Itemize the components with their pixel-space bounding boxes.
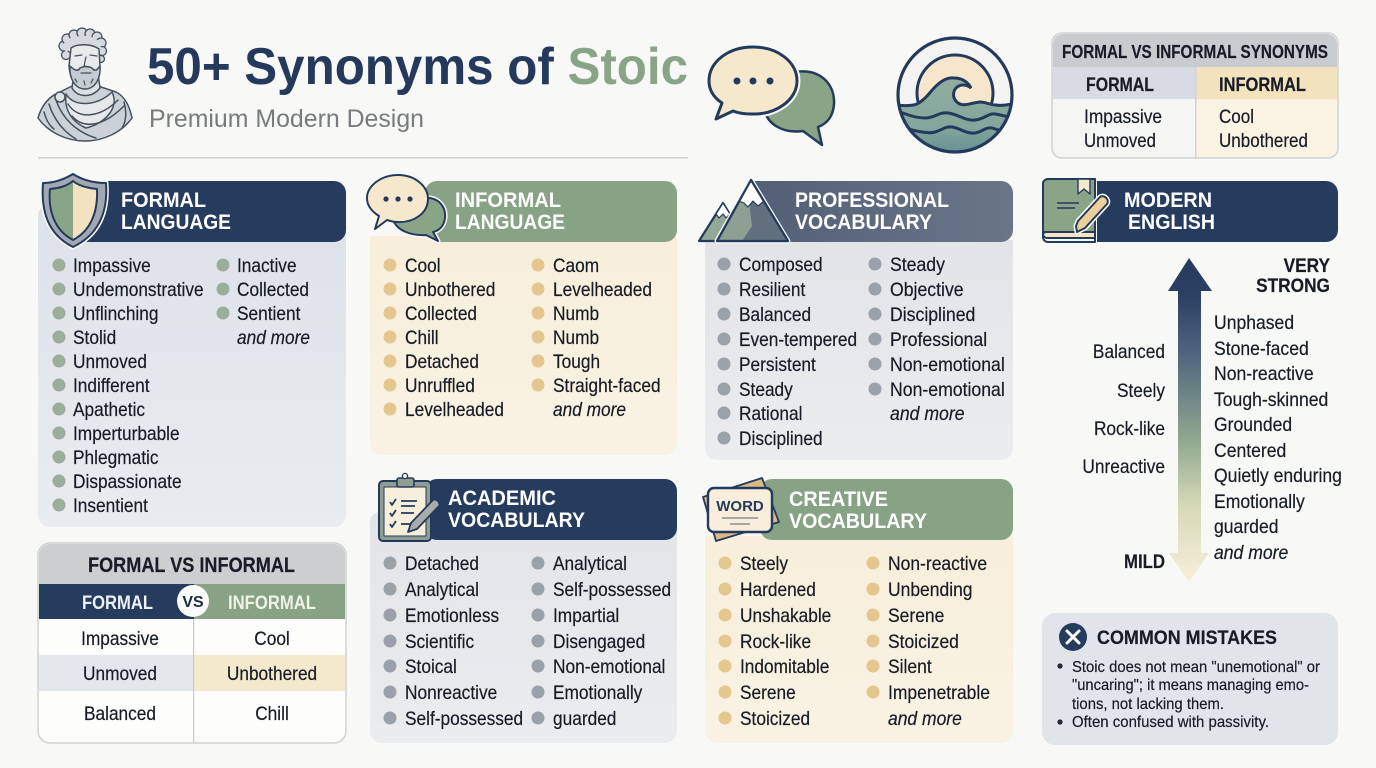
bullets bbox=[718, 258, 882, 444]
column heads: INFORMAL bbox=[228, 593, 316, 614]
word list left: Indomitable bbox=[740, 656, 829, 677]
word list right: Non-emotional bbox=[553, 656, 665, 677]
word list right: Non-emotional bbox=[890, 378, 1005, 400]
word list left: Stolid bbox=[73, 327, 116, 348]
label: very strong: VERY bbox=[1284, 255, 1330, 276]
table entries right: Unbothered bbox=[227, 663, 317, 684]
word list left: Imperturbable bbox=[73, 423, 180, 444]
header: professional vocabulary: PROFESSIONAL bbox=[795, 189, 949, 212]
header: academic vocabulary: ACADEMIC bbox=[448, 487, 556, 510]
header: academic vocabulary bbox=[425, 479, 677, 540]
header: academic vocabulary: VOCABULARY bbox=[448, 509, 585, 532]
header: creative vocabulary bbox=[760, 479, 1013, 540]
header: informal language bbox=[425, 181, 677, 242]
label: very strong: STRONG bbox=[1256, 275, 1330, 296]
table title: FORMAL VS INFORMAL bbox=[88, 554, 295, 577]
word list right: Professional bbox=[890, 328, 987, 350]
word list right: Disengaged bbox=[553, 631, 645, 652]
panel: academic vocabulary bbox=[370, 473, 677, 743]
word list left: Disciplined bbox=[739, 428, 823, 449]
icon: clipboard and pencil bbox=[379, 473, 439, 541]
word list right: and more bbox=[890, 402, 965, 424]
word list left: Rock-like bbox=[740, 631, 811, 652]
word list left: Undemonstrative bbox=[73, 279, 204, 300]
word list right: Analytical bbox=[553, 553, 627, 574]
word list: strong side: Unphased bbox=[1214, 311, 1294, 333]
word list: strong side: Centered bbox=[1214, 439, 1286, 461]
table entries: Unbothered bbox=[1219, 131, 1308, 152]
word list left: Resilient bbox=[739, 279, 805, 300]
word list right: Inactive bbox=[237, 255, 297, 276]
bullets bbox=[52, 258, 230, 512]
word list right: guarded bbox=[553, 708, 616, 729]
word list right: Serene bbox=[888, 604, 944, 626]
word list right: Collected bbox=[237, 279, 309, 300]
header: creative vocabulary: CREATIVE bbox=[789, 488, 888, 511]
panel: formal language bbox=[38, 174, 346, 527]
word list left: Steady bbox=[739, 379, 794, 400]
word list left: Detached bbox=[405, 553, 479, 574]
column heads: FORMAL bbox=[1086, 75, 1154, 96]
bullets bbox=[384, 258, 544, 416]
word list left: Dispassionate bbox=[73, 471, 182, 492]
word list left: Stoicized bbox=[740, 708, 810, 729]
word list: strong side bbox=[1214, 311, 1342, 563]
word list left: Stoical bbox=[405, 656, 457, 677]
word list right: Numb bbox=[553, 303, 599, 324]
word list right: Stoicized bbox=[888, 630, 959, 652]
word list left: Unruffled bbox=[405, 375, 475, 396]
word list left: Serene bbox=[740, 682, 796, 703]
word list left: Nonreactive bbox=[405, 682, 497, 703]
table entries left bbox=[81, 628, 159, 724]
header: modern english bbox=[1097, 181, 1338, 242]
icon: shield bbox=[43, 174, 106, 247]
word list left: Rational bbox=[739, 403, 802, 424]
word list right: Sentient bbox=[237, 303, 300, 324]
table entries: Impassive bbox=[1084, 107, 1162, 128]
bullets bbox=[718, 556, 880, 724]
word list left: Balanced bbox=[739, 304, 811, 325]
word list: mild side: Unreactive bbox=[1082, 456, 1165, 477]
word list left: Levelheaded bbox=[405, 399, 504, 420]
word list left: Self-possessed bbox=[405, 708, 523, 729]
header: formal language: LANGUAGE bbox=[121, 211, 231, 234]
word list left bbox=[405, 553, 523, 729]
word list left: Unshakable bbox=[740, 605, 831, 626]
word list: mild side: Rock-like bbox=[1094, 418, 1165, 439]
panel: common mistakes bbox=[1042, 613, 1338, 745]
header: formal language bbox=[76, 181, 346, 242]
word list right: Disciplined bbox=[890, 303, 975, 325]
header: professional vocabulary bbox=[752, 181, 1013, 242]
header: informal language: INFORMAL bbox=[455, 189, 561, 212]
word list right: Silent bbox=[888, 655, 932, 677]
mistakes text bbox=[1057, 659, 1321, 731]
word list right bbox=[553, 255, 661, 420]
word list left bbox=[740, 553, 831, 729]
word list: strong side: Grounded bbox=[1214, 413, 1292, 435]
word list: strong side: Quietly enduring bbox=[1214, 464, 1342, 486]
word list right: and more bbox=[553, 399, 626, 420]
word list left: Unflinching bbox=[73, 303, 159, 324]
column heads bbox=[82, 593, 316, 614]
table title: FORMAL VS INFORMAL SYNONYMS bbox=[1062, 42, 1328, 62]
mistakes text: Stoic does not mean "unemotional" or bbox=[1072, 659, 1321, 676]
column heads: INFORMAL bbox=[1219, 75, 1306, 96]
word list: mild side: Balanced bbox=[1093, 341, 1165, 362]
word list: strong side: Emotionally bbox=[1214, 490, 1306, 512]
word list left: Hardened bbox=[740, 579, 816, 600]
label: mild: MILD bbox=[1124, 552, 1165, 573]
word list right: and more bbox=[237, 327, 310, 348]
word list right: Impartial bbox=[553, 605, 619, 626]
panel: formal vs informal synonyms bbox=[1052, 33, 1338, 158]
word list right: Numb bbox=[553, 327, 599, 348]
mistakes text: tions, not lacking them. bbox=[1072, 696, 1224, 713]
word list right: Emotionally bbox=[553, 682, 643, 703]
title: 50+ Synonyms of Stoic bbox=[147, 38, 688, 96]
word list right: Tough bbox=[553, 351, 600, 372]
table entries left: Impassive bbox=[81, 628, 159, 649]
word list right: and more bbox=[888, 707, 962, 729]
word list left: Unbothered bbox=[405, 279, 495, 300]
word list: strong side: guarded bbox=[1214, 515, 1278, 537]
icon: word cards bbox=[703, 478, 779, 541]
arrow: strength scale bbox=[1168, 258, 1212, 582]
vs badge bbox=[177, 585, 209, 617]
header: professional vocabulary: VOCABULARY bbox=[795, 211, 932, 234]
header: creative vocabulary: VOCABULARY bbox=[789, 510, 927, 533]
word list right: Objective bbox=[890, 278, 964, 300]
header: modern english: MODERN bbox=[1124, 189, 1212, 212]
panel: professional vocabulary bbox=[699, 180, 1013, 460]
word list left: Persistent bbox=[739, 354, 816, 375]
word list left bbox=[739, 254, 857, 449]
word list left: Insentient bbox=[73, 495, 148, 516]
word list right bbox=[553, 553, 671, 729]
word list right: Unbending bbox=[888, 578, 973, 600]
word list left: Collected bbox=[405, 303, 477, 324]
word list right: Straight-faced bbox=[553, 375, 661, 396]
vs badge: VS bbox=[182, 594, 204, 611]
icon: wave in circle bbox=[895, 38, 1016, 160]
panel: creative vocabulary bbox=[703, 478, 1013, 743]
table entries right: Cool bbox=[254, 628, 290, 649]
label: very strong bbox=[1256, 255, 1330, 296]
column heads bbox=[1086, 75, 1306, 96]
word list left: Cool bbox=[405, 255, 441, 276]
word list: mild side bbox=[1082, 341, 1166, 477]
word list right bbox=[237, 255, 310, 348]
header: modern english: ENGLISH bbox=[1128, 211, 1215, 234]
word list right: Levelheaded bbox=[553, 279, 652, 300]
word list left: Steely bbox=[740, 553, 789, 574]
table entries left: Balanced bbox=[84, 703, 156, 724]
word list left: Phlegmatic bbox=[73, 447, 159, 468]
icon: x mark bbox=[1059, 623, 1087, 651]
word list left: Even-tempered bbox=[739, 329, 857, 350]
icon: stoic philosopher bust bbox=[38, 28, 132, 141]
table entries right: Chill bbox=[255, 703, 289, 724]
word list left: Detached bbox=[405, 351, 479, 372]
word list left: Unmoved bbox=[73, 351, 147, 372]
word list: strong side: Stone-faced bbox=[1214, 337, 1309, 359]
word list right bbox=[888, 552, 990, 729]
word list right: Non-emotional bbox=[890, 353, 1005, 375]
word list right: Self-possessed bbox=[553, 579, 671, 600]
panel: modern english bbox=[1043, 179, 1338, 242]
word list: strong side: and more bbox=[1214, 541, 1288, 563]
icon: mountains bbox=[699, 180, 788, 241]
header: formal language: FORMAL bbox=[121, 189, 206, 212]
word list left: Analytical bbox=[405, 579, 479, 600]
word list left: Emotionless bbox=[405, 605, 499, 626]
table entries right bbox=[227, 628, 317, 724]
bullets bbox=[384, 556, 544, 724]
mistakes heading: COMMON MISTAKES bbox=[1097, 628, 1277, 649]
word list right: Steady bbox=[890, 253, 946, 275]
icon: speech bubbles bbox=[367, 175, 445, 241]
word list right: Impenetrable bbox=[888, 681, 990, 703]
icon: book and pencil bbox=[1043, 179, 1108, 242]
word list: strong side: Tough-skinned bbox=[1214, 388, 1328, 410]
word list left: Indifferent bbox=[73, 375, 150, 396]
column heads: FORMAL bbox=[82, 593, 153, 614]
word list: strong side: Non-reactive bbox=[1214, 362, 1314, 384]
word list right bbox=[890, 253, 1005, 424]
table entries: Cool bbox=[1219, 107, 1254, 128]
word list left: Chill bbox=[405, 327, 439, 348]
table entries: Unmoved bbox=[1084, 131, 1156, 152]
word list right: Caom bbox=[553, 255, 599, 276]
word list left: Impassive bbox=[73, 255, 151, 276]
icon: speech bubbles bbox=[709, 47, 834, 145]
word list: mild side: Steely bbox=[1117, 380, 1166, 401]
table entries left: Unmoved bbox=[83, 663, 157, 684]
header: informal language: LANGUAGE bbox=[455, 211, 565, 234]
word list left: Composed bbox=[739, 254, 823, 275]
panel: formal vs informal table bbox=[38, 543, 346, 743]
word list left bbox=[405, 255, 504, 420]
mistakes text: Often confused with passivity. bbox=[1072, 714, 1269, 731]
word list left bbox=[73, 255, 204, 516]
subtitle: Premium Modern Design bbox=[149, 105, 424, 133]
word list left: Apathetic bbox=[73, 399, 145, 420]
mistakes text: "uncaring"; it means managing emo- bbox=[1072, 677, 1309, 694]
panel: informal language bbox=[367, 175, 677, 455]
word list left: Scientific bbox=[405, 631, 474, 652]
word list right: Non-reactive bbox=[888, 552, 987, 574]
table entries bbox=[1084, 107, 1308, 152]
icon: word cards: WORD bbox=[716, 498, 764, 515]
